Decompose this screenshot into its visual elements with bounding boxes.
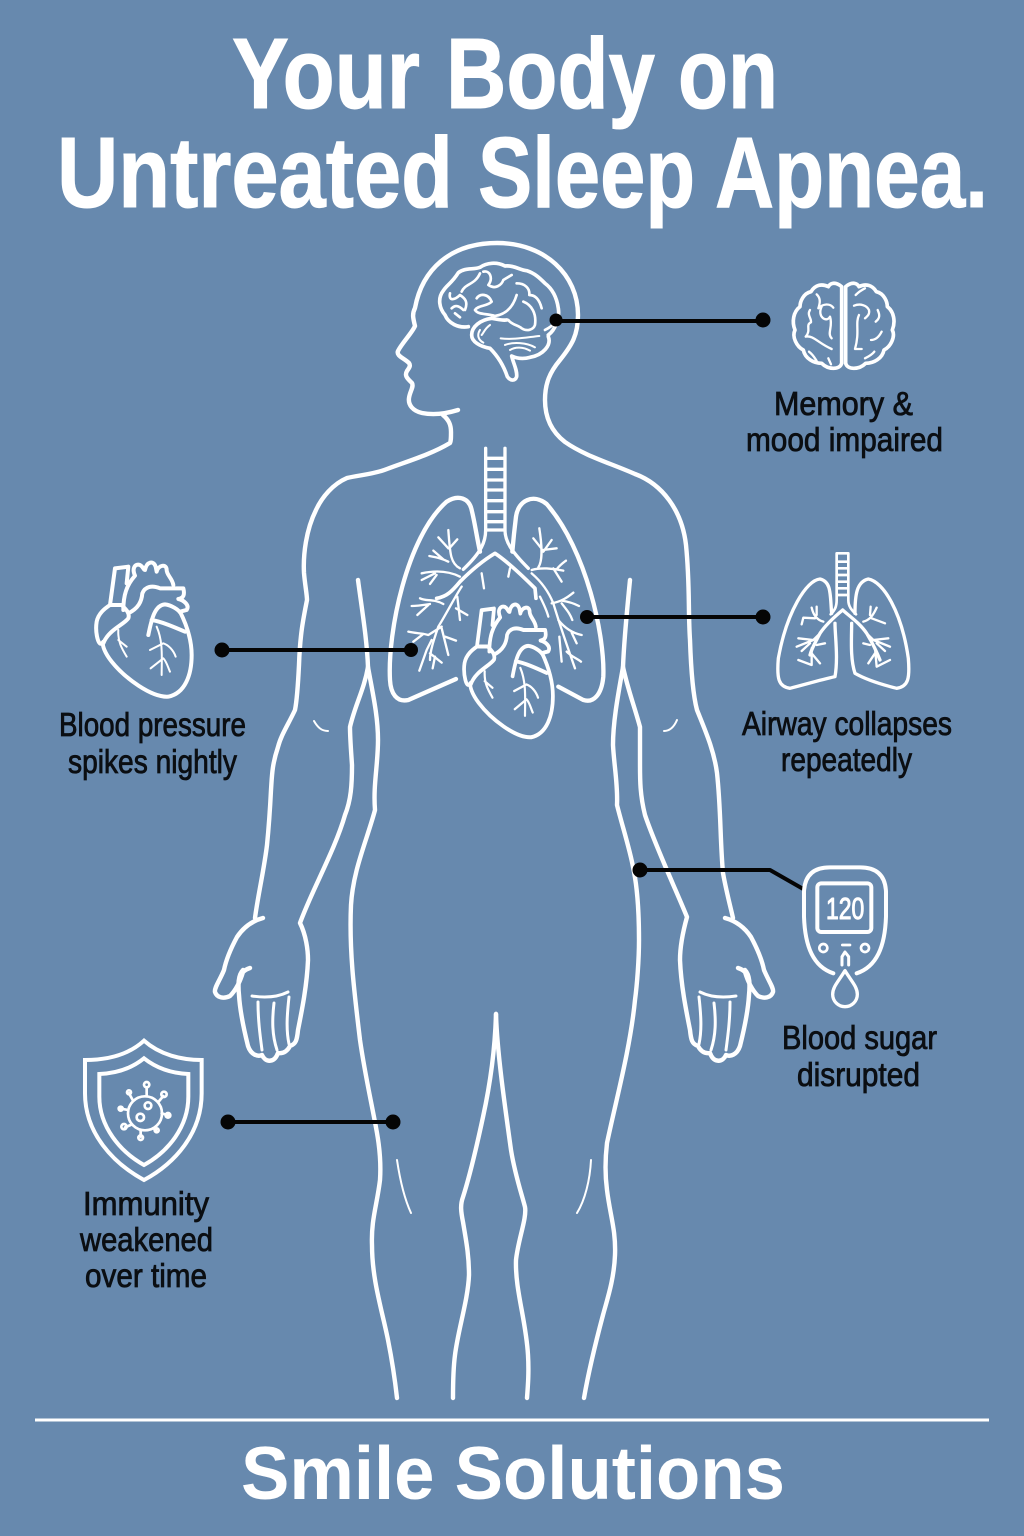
connector: brain xyxy=(550,312,770,328)
label: memory xyxy=(746,385,943,458)
head, neck and right shoulder and outer arm xyxy=(398,243,733,918)
label: immunity: weakened xyxy=(79,1221,213,1258)
label: blood pressure: Blood pressure xyxy=(59,706,246,743)
label: airway xyxy=(742,705,952,778)
title: Sleep xyxy=(478,117,695,229)
icon: brain xyxy=(793,283,894,368)
label: immunity: Immunity xyxy=(83,1185,209,1222)
body heart xyxy=(464,604,553,737)
icon: glucose meter: 120 xyxy=(826,892,864,926)
label: blood sugar: Blood sugar xyxy=(782,1019,937,1056)
left hand xyxy=(215,667,368,1061)
right hand xyxy=(623,667,773,1061)
label: blood sugar: disrupted xyxy=(797,1056,920,1093)
connector: blood sugar xyxy=(632,862,805,890)
body lungs xyxy=(390,448,603,701)
right inner line and right leg xyxy=(584,580,639,1398)
label: blood pressure: spikes nightly xyxy=(68,743,237,780)
icon: heart xyxy=(96,563,192,697)
connector: immunity xyxy=(220,1114,400,1130)
label: blood pressure xyxy=(59,706,246,780)
title: on xyxy=(678,18,778,130)
icon: glucose meter xyxy=(804,867,886,1007)
inner legs xyxy=(453,1014,496,1398)
connector: heart xyxy=(214,642,418,658)
footer divider xyxy=(35,1418,989,1422)
title: Your xyxy=(232,18,420,130)
icon: lungs xyxy=(778,553,909,688)
title: Untreated xyxy=(57,117,453,229)
knee and arm creases xyxy=(314,720,677,1213)
label: immunity: over time xyxy=(85,1257,207,1294)
label: blood sugar xyxy=(782,1019,937,1093)
trachea xyxy=(463,448,528,569)
icon: shield xyxy=(85,1041,202,1180)
footer brand: Smile Solutions xyxy=(241,1431,785,1515)
label: memory: Memory & xyxy=(774,385,913,422)
title: Body xyxy=(446,18,655,130)
connector: lungs xyxy=(580,610,770,624)
body brain xyxy=(440,263,559,380)
left neck, shoulder and outer arm xyxy=(255,415,451,918)
body outline xyxy=(215,243,773,1398)
left inner line and left leg xyxy=(351,580,397,1398)
title xyxy=(57,18,988,229)
label: airway: repeatedly xyxy=(781,741,912,778)
label: airway: Airway collapses xyxy=(742,705,952,742)
label: memory: mood impaired xyxy=(746,421,943,458)
label: immunity xyxy=(79,1185,213,1294)
